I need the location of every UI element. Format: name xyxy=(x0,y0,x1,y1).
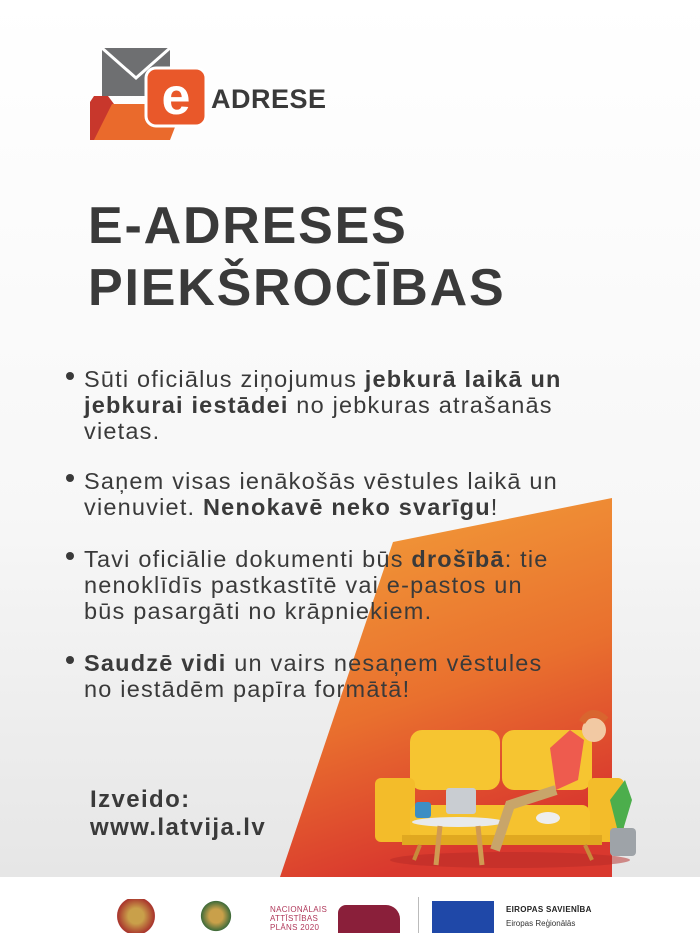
logo: coat of arms 1 xyxy=(110,899,162,933)
logo: EU: Eiropas Reģionālās xyxy=(506,919,575,928)
bullet list xyxy=(66,366,562,702)
logo: national plan: PLĀNS 2020 xyxy=(270,923,319,932)
logo: EU xyxy=(432,901,592,933)
footer xyxy=(0,877,700,933)
bullet 4: Saudzē vidi un vairs nesaņem vēstules xyxy=(84,650,542,676)
title xyxy=(88,197,505,317)
bullet 2 xyxy=(66,468,558,520)
call to action: www.latvija.lv xyxy=(90,814,266,841)
bullet 1: jebkurai iestādei no jebkuras atrašanās xyxy=(84,392,553,418)
bullet 1: Sūti oficiālus ziņojumus jebkurā laikā un xyxy=(84,366,562,392)
call to action xyxy=(90,786,266,841)
logo: national plan xyxy=(270,905,400,933)
logo: e-adrese xyxy=(90,48,327,140)
call to action: Izveido: xyxy=(90,786,191,813)
bullet 2: Saņem visas ienākošās vēstules laikā un xyxy=(84,468,558,494)
bullet 3: Tavi oficiālie dokumenti būs drošībā: tie xyxy=(84,546,549,572)
logo: e-adrese: e xyxy=(162,68,190,126)
logo: coat of arms 2 xyxy=(198,899,234,933)
bullet 4: no iestādēm papīra formātā! xyxy=(84,676,410,702)
illustration: man on sofa xyxy=(375,710,636,868)
logo: national plan: NACIONĀLAIS xyxy=(270,905,327,914)
logo: e-adrese: ADRESE xyxy=(211,84,327,114)
bullet 1 xyxy=(66,366,562,444)
bullet 4 xyxy=(66,650,542,702)
logo: national plan: ATTĪSTĪBAS xyxy=(270,914,318,923)
bullet 3 xyxy=(66,546,549,624)
bullet 1: vietas. xyxy=(84,418,160,444)
bullet 3: nenoklīdīs pastkastītē vai e-pastos un xyxy=(84,572,523,598)
bullet 2: vienuviet. Nenokavē neko svarīgu! xyxy=(84,494,498,520)
logo: EU: EIROPAS SAVIENĪBA xyxy=(506,905,592,914)
bullet 3: būs pasargāti no krāpniekiem. xyxy=(84,598,432,624)
title: PIEKŠROCĪBAS xyxy=(88,259,505,317)
title: E-ADRESES xyxy=(88,197,408,255)
